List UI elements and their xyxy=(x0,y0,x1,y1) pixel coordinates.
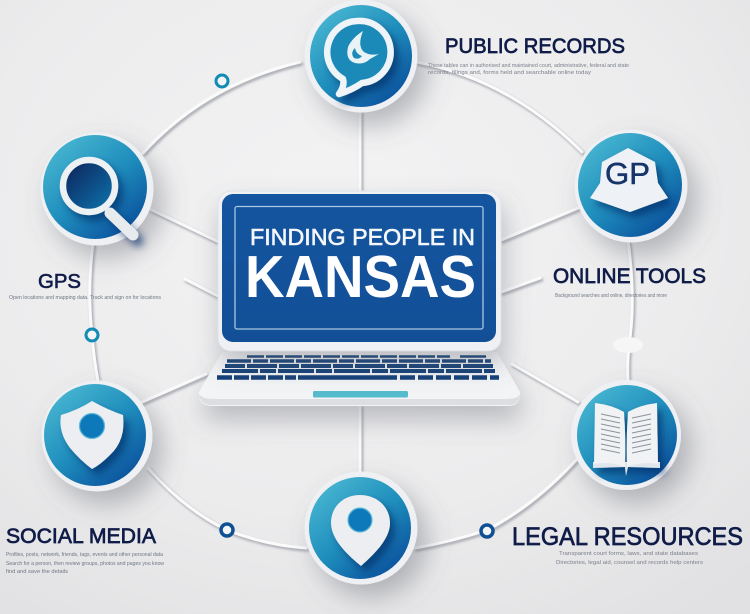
laptop screen xyxy=(218,191,501,351)
location disc xyxy=(304,472,418,584)
node: social media xyxy=(42,380,152,492)
connector line shadows xyxy=(91,64,634,550)
legal resources disc xyxy=(571,380,681,490)
connector node: top left xyxy=(216,75,228,87)
gps disc xyxy=(40,132,154,246)
label: legal resources xyxy=(512,523,743,566)
connector node: bottom right xyxy=(481,525,493,537)
title line: finding people in: FINDING PEOPLE IN xyxy=(250,224,475,250)
label: social media: SOCIAL MEDIA xyxy=(6,525,156,548)
description: legal resources: Transparent court forms, laws, and state databases xyxy=(559,551,699,557)
description: public records: records, filings and, forms held and searchable online today xyxy=(428,70,592,76)
label: online tools xyxy=(553,265,706,299)
connector node: left xyxy=(86,329,98,341)
description: social media: Search for a person, then review groups, photos and pages you know xyxy=(6,561,164,567)
node: online tools xyxy=(574,130,688,242)
connector node: right blob xyxy=(613,337,643,353)
label: legal resources: LEGAL RESOURCES xyxy=(512,523,743,551)
node: gps xyxy=(40,132,154,246)
description: public records xyxy=(428,63,629,76)
public records disc xyxy=(304,0,418,112)
label: public records xyxy=(428,35,629,76)
node: legal resources xyxy=(571,380,681,490)
icon: open book xyxy=(593,403,660,476)
label: social media xyxy=(6,525,164,575)
description: social media xyxy=(6,552,164,575)
connector node: bottom left xyxy=(221,524,233,536)
node: location xyxy=(304,472,418,584)
description: public records: These tables can in authorised and maintained court, administrative, federal and state xyxy=(428,63,629,69)
label: public records: PUBLIC RECORDS xyxy=(445,35,625,58)
description: social media: Profiles, posts, network, friends, tags, events and other personal data xyxy=(6,552,163,558)
label: gps: GPS xyxy=(38,271,81,293)
icon: open book with letters: GP xyxy=(605,156,650,191)
description: social media: find and save the details xyxy=(6,569,69,575)
laptop keyboard xyxy=(217,356,499,378)
description: legal resources: Directories, legal aid, counsel and records help centers xyxy=(556,560,704,566)
node: public records xyxy=(304,0,418,112)
label: gps xyxy=(9,271,162,301)
icon: speech bubble xyxy=(327,21,391,94)
title line: kansas: KANSAS xyxy=(245,244,476,310)
icon: shield xyxy=(60,401,123,469)
connector lines xyxy=(90,62,632,548)
label: online tools: ONLINE TOOLS xyxy=(553,265,706,288)
description: legal resources xyxy=(556,551,704,566)
online tools disc xyxy=(574,130,688,242)
description: gps: Open locations and mapping data. Track and sign on for locations xyxy=(9,295,162,301)
description: online tools: Background searches and online, directories and more xyxy=(555,293,667,299)
icon: magnifying glass xyxy=(63,160,133,235)
screen inner frame xyxy=(235,206,483,329)
laptop trackpad xyxy=(313,391,408,398)
laptop xyxy=(199,191,520,406)
icon: map pin xyxy=(331,495,390,566)
laptop base xyxy=(199,352,520,406)
social media disc xyxy=(42,380,152,492)
